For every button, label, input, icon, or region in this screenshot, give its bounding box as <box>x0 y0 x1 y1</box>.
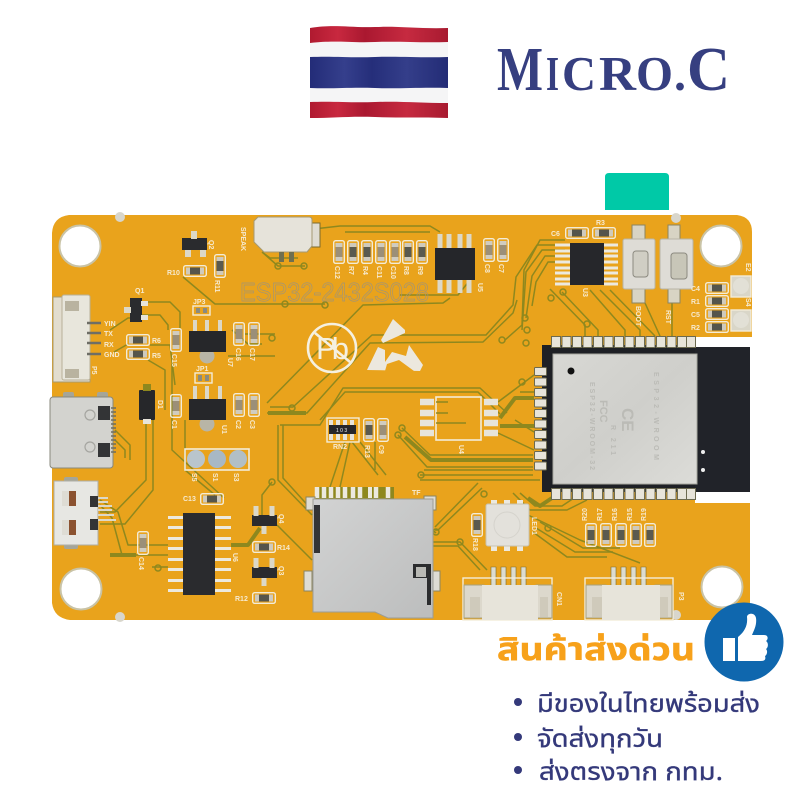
resistor R14: R14 <box>277 545 290 552</box>
TF card slot <box>304 487 440 618</box>
connector P3 <box>585 567 684 620</box>
bullet item 3: ส่งตรงจาก กทม. <box>539 754 723 792</box>
connector P5 with pin labels: YIN <box>104 321 116 328</box>
button RST <box>660 225 693 325</box>
connector P5 with pin labels: TX <box>104 331 113 338</box>
resistors R20 R17 R16 R15 R19 <box>582 508 655 546</box>
capacitors C15 C16 C17: C16 <box>234 348 241 361</box>
resistor row C12 to R9: R4 <box>361 266 368 275</box>
resistor row C12 to R9: R9 <box>416 266 423 275</box>
silkscreen: board name: ESP32-2432S028 <box>240 277 429 307</box>
green protective tab <box>605 173 669 210</box>
capacitor C14 <box>137 532 148 570</box>
transistor Q4 <box>252 506 284 534</box>
capacitor C13: C13 <box>183 496 196 503</box>
ESP32 module: R 211 <box>609 425 616 455</box>
capacitors C15 C16 C17 <box>170 323 259 367</box>
chip U3: U3 <box>581 288 588 297</box>
ESP32 module: ESP32-WROOM-32 <box>588 382 595 470</box>
connector: speaker: SPEAK <box>239 227 246 251</box>
transistor Q1: Q1 <box>135 288 144 295</box>
C6 R3: R3 <box>596 220 605 227</box>
resistor R14 <box>253 542 290 552</box>
regulator U1: JP1 <box>196 366 209 373</box>
transistor Q2 <box>182 231 214 257</box>
connector P5 with pin labels: P5 <box>90 366 97 375</box>
C6 R3: C6 <box>551 231 560 238</box>
LED1: LED1 <box>530 517 537 535</box>
capacitors C15 C16 C17: C15 <box>170 354 177 367</box>
connector P3: P3 <box>677 592 684 601</box>
module left pads <box>534 368 546 470</box>
mounting holes <box>60 226 742 610</box>
PCB outline <box>52 215 752 620</box>
resistor R12 <box>235 593 275 603</box>
bullet list <box>514 686 760 792</box>
connector P5 with pin labels: GND <box>104 352 120 359</box>
resistors R6 R5: R6 <box>152 338 161 345</box>
C6 R3 <box>551 220 615 238</box>
R13 C9: C9 <box>377 445 384 454</box>
regulator U1: U1 <box>220 425 227 434</box>
button RST: RST <box>664 310 671 325</box>
capacitors C8 C7 <box>483 239 508 273</box>
logo: Micro.C: . <box>674 46 686 101</box>
transistor Q4: Q4 <box>277 514 284 523</box>
resistor R10 <box>167 266 206 277</box>
regulator U1 <box>189 366 227 434</box>
transistor Q3 <box>252 558 284 586</box>
capacitors C8 C7: C7 <box>497 264 504 273</box>
test pads S5 S1 S3: S3 <box>232 473 239 482</box>
logo: Micro.C: C <box>562 46 596 101</box>
logo: Micro.C: M <box>497 36 543 104</box>
resistor row C12 to R9: R8 <box>402 266 409 275</box>
ESP32 module: FCC <box>597 400 609 423</box>
capacitor C14: C14 <box>137 557 144 570</box>
Micro USB port <box>54 477 116 549</box>
logo: Micro.C: O <box>636 46 673 101</box>
transistor Q3: Q3 <box>277 566 284 575</box>
R13 C9: R13 <box>363 445 370 458</box>
icon: ESD warning triangle <box>367 319 423 371</box>
transistor Q2: Q2 <box>207 240 214 249</box>
icon: lead-free Pb: Pb <box>316 331 349 366</box>
regulator U7: JP3 <box>193 299 206 306</box>
resistor network RN2: RN2 <box>333 444 347 451</box>
resistors R20 R17 R16 R15 R19: R15 <box>627 508 634 521</box>
chip footprint U4 <box>420 397 498 454</box>
ESP32 module <box>534 336 750 500</box>
resistors R6 R5 <box>127 335 161 360</box>
transistor Q1 <box>124 288 148 322</box>
test pads E2 S4: S4 <box>744 298 751 307</box>
button BOOT: BOOT <box>634 306 641 327</box>
connector: speaker <box>239 217 320 262</box>
module bottom pads <box>552 488 696 500</box>
traces <box>100 226 672 570</box>
chip U6 <box>168 513 238 595</box>
resistors R6 R5: R5 <box>152 353 161 360</box>
USB-C port <box>50 392 116 468</box>
logo: Micro.C: R <box>599 46 637 101</box>
capacitors C1 C2 C3: C3 <box>248 420 255 429</box>
capacitors C1 C2 C3: C2 <box>234 420 241 429</box>
regulator U7: U7 <box>226 358 233 367</box>
C4 R1 C5 R2 <box>691 283 728 332</box>
resistors R20 R17 R16 R15 R19: R17 <box>597 508 604 521</box>
R13 C9 <box>363 419 388 458</box>
LED1 <box>486 500 537 551</box>
resistor R11 <box>213 255 225 293</box>
resistor row C12 to R9: C12 <box>333 266 340 279</box>
test pads E2 S4: E2 <box>744 263 751 272</box>
chip U5 <box>435 234 483 293</box>
chip U3 <box>555 243 618 297</box>
resistor row C12 to R9: C11 <box>375 266 382 279</box>
connector P5 with pin labels <box>53 295 120 382</box>
button BOOT <box>623 225 655 327</box>
resistors R20 R17 R16 R15 R19: R20 <box>582 508 589 521</box>
resistor row C12 to R9 <box>333 241 427 279</box>
regulator U7 <box>189 299 233 367</box>
ESP32 module: CE <box>618 408 637 432</box>
resistor row C12 to R9: R7 <box>347 266 354 275</box>
diode D1 <box>139 384 163 424</box>
test pads S5 S1 S3: S1 <box>211 473 218 482</box>
chip footprint U4: U4 <box>457 445 464 454</box>
capacitors C1 C2 C3 <box>170 394 259 429</box>
logo: Micro.C: C <box>687 36 730 104</box>
connector P5 with pin labels: RX <box>104 342 114 349</box>
C4 R1 C5 R2: C4 <box>691 286 700 293</box>
bullet item 2: จัดส่งทุกวัน <box>537 721 663 759</box>
resistor row C12 to R9: C10 <box>389 266 396 279</box>
connector CN1 <box>463 567 562 620</box>
C4 R1 C5 R2: R2 <box>691 325 700 332</box>
diode D1: D1 <box>156 400 163 409</box>
capacitor C13 <box>183 494 223 504</box>
resistor network RN2: 1 0 3 <box>336 428 347 434</box>
chip U6: U6 <box>231 553 238 562</box>
capacitors C8 C7: C8 <box>483 264 490 273</box>
resistor network RN2 <box>327 418 359 451</box>
resistor R18 <box>471 514 482 551</box>
chip U5: U5 <box>476 283 483 292</box>
logo: Micro.C: I <box>546 46 559 101</box>
resistor R10: R10 <box>167 270 180 277</box>
Thai flag <box>310 26 448 118</box>
icon: thumbs up <box>704 602 784 682</box>
capacitors C15 C16 C17: C17 <box>248 348 255 361</box>
connector CN1: CN1 <box>555 592 562 606</box>
bullet item 1: มีของในไทยพร้อมส่ง <box>537 686 760 724</box>
resistors R20 R17 R16 R15 R19: R16 <box>612 508 619 521</box>
test pads E2 S4 <box>731 263 751 331</box>
vias <box>155 263 590 571</box>
logo: Micro.C <box>497 36 730 104</box>
resistor R18: R18 <box>471 538 478 551</box>
resistors R20 R17 R16 R15 R19: R19 <box>641 508 648 521</box>
test pads S5 S1 S3 <box>185 449 249 482</box>
C4 R1 C5 R2: R1 <box>691 299 700 306</box>
resistor R12: R12 <box>235 596 248 603</box>
TF card slot: TF <box>412 490 421 497</box>
C4 R1 C5 R2: C5 <box>691 312 700 319</box>
board: ESP32-2432S028 PCB <box>50 212 752 622</box>
icon: lead-free Pb <box>308 324 356 372</box>
test pads S5 S1 S3: S5 <box>190 473 197 482</box>
resistor R11: R11 <box>213 280 220 293</box>
capacitors C1 C2 C3: C1 <box>170 420 177 429</box>
heading: fast delivery: สินค้าส่งด่วน <box>497 627 695 674</box>
ESP32 module: ESP32-WROOM <box>652 372 659 460</box>
module top pads <box>552 336 696 348</box>
